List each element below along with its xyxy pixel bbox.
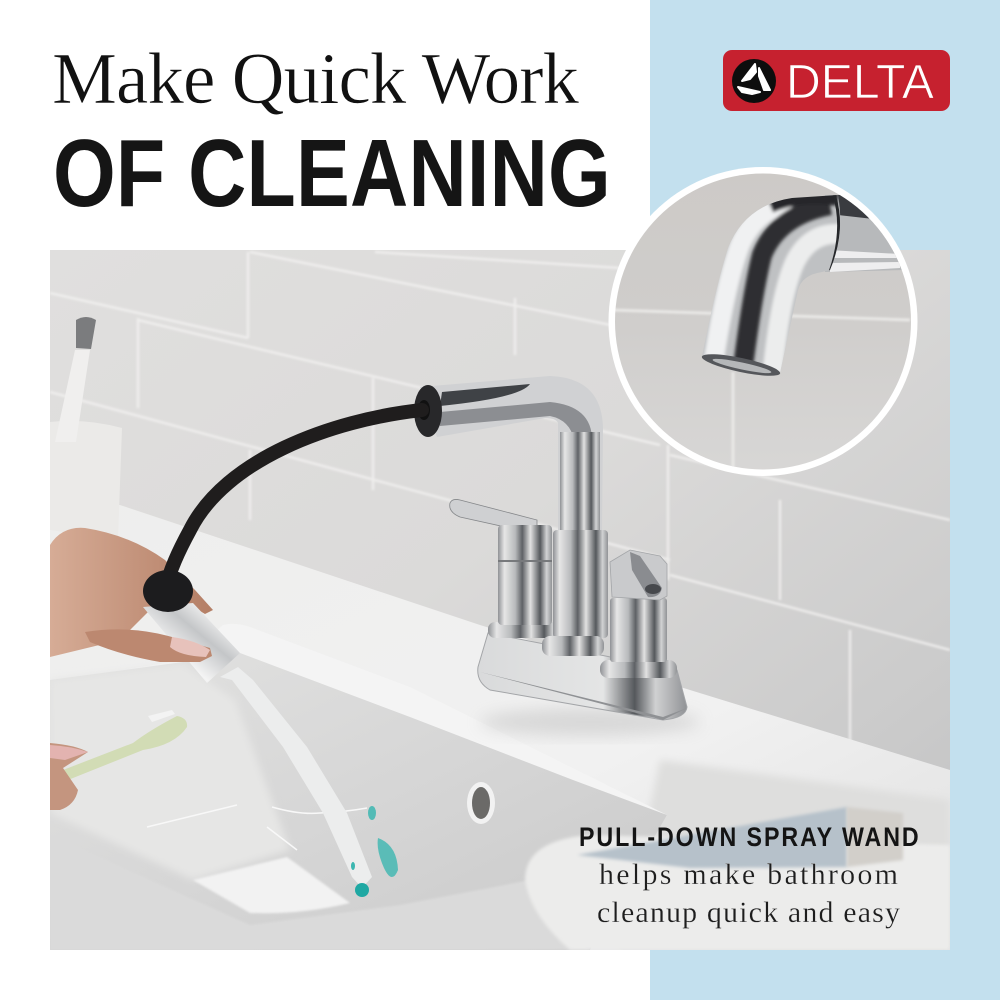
caption: PULL-DOWN SPRAY WAND: [579, 822, 919, 852]
title: [52, 38, 611, 227]
right handle: [600, 660, 677, 678]
teal toothpaste: [351, 806, 398, 897]
black hose: [165, 410, 422, 590]
deck plate: [478, 633, 687, 720]
logo: Delta: [723, 50, 950, 111]
left handle: [449, 499, 538, 526]
counter top: [50, 505, 950, 950]
faucet: [414, 376, 687, 720]
thumb: [85, 629, 212, 662]
tile wall: [50, 250, 950, 770]
hand back and fingers behind wand: [50, 528, 213, 657]
toothbrush and cup: [50, 317, 122, 505]
caption: [579, 822, 919, 929]
sink basin: [50, 624, 667, 950]
faucet shadow: [480, 708, 700, 736]
central column and spout: [553, 530, 608, 638]
title: OF CLEANING: [53, 119, 611, 227]
logo: Delta: DELTA: [786, 56, 934, 109]
photo: faucet with spray wand in use: [50, 250, 950, 950]
towel: [525, 807, 950, 950]
spout end: [414, 385, 442, 437]
spray wand: [143, 570, 240, 683]
inset circle: spout closeup: [608, 167, 920, 480]
title: Make Quick Work: [52, 38, 580, 119]
blue background panel: [650, 0, 1000, 1000]
pipe behind spout: [825, 195, 905, 272]
caption: helps make bathroom: [599, 858, 898, 891]
water stream: [220, 667, 372, 888]
second hand with green toothbrush: [50, 710, 187, 810]
caption: cleanup quick and easy: [597, 896, 900, 929]
